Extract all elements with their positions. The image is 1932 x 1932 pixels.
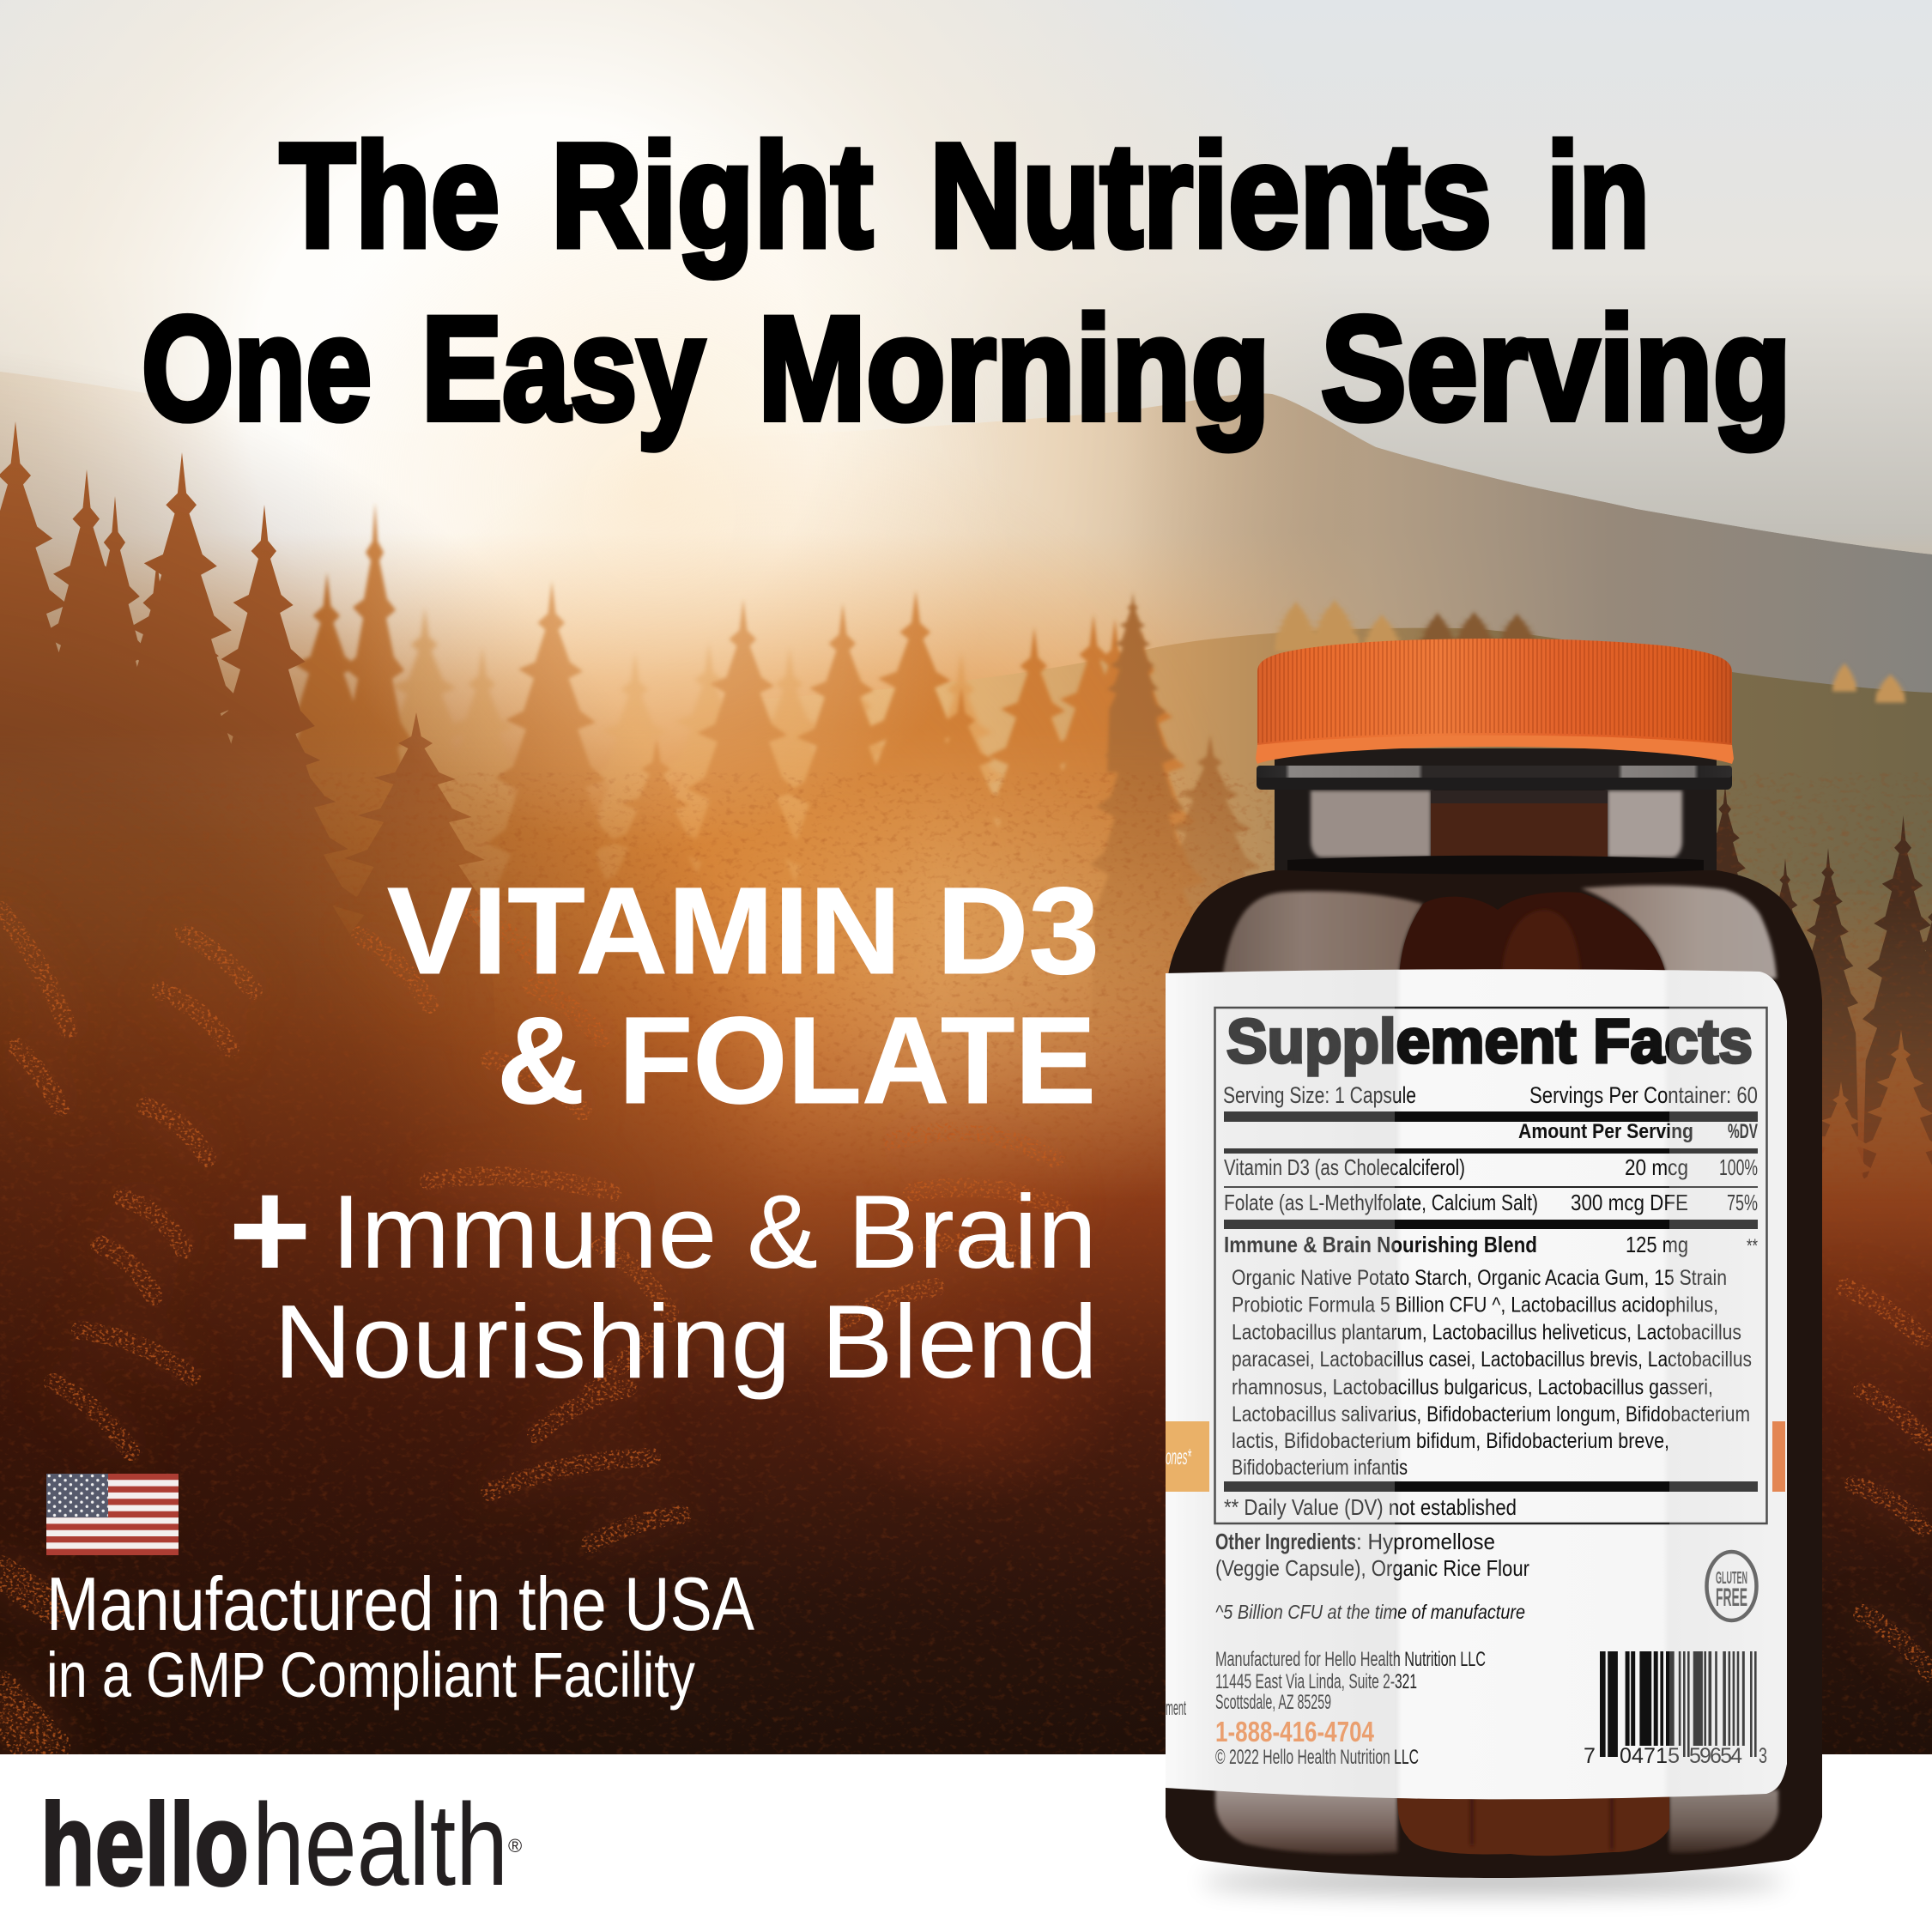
heading: Vitamin D3 and Folate: & FOLATE — [497, 991, 1096, 1130]
label side band: left orange: ones* — [1166, 1444, 1191, 1469]
blend ingredients list: paracasei, Lactobacillus casei, Lactobacillus brevis, Lactobacillus — [1232, 1348, 1752, 1372]
serving information: Servings Per Container: 60 — [1529, 1082, 1758, 1108]
phone number: 1-888-416-4704 — [1215, 1716, 1375, 1747]
bottle flange — [1257, 766, 1732, 790]
barcode — [1584, 1651, 1767, 1768]
row: Vitamin D3: 20 mcg — [1625, 1154, 1688, 1180]
other ingredients: Other Ingredients — [1215, 1529, 1356, 1554]
manufacturer address: Manufactured for Hello Health Nutrition LLC — [1215, 1648, 1486, 1671]
amount header: Amount Per Serving — [1518, 1120, 1693, 1143]
bottle neck — [1275, 748, 1717, 874]
title heading: Nutrients — [930, 113, 1492, 278]
title heading: The — [280, 113, 500, 278]
barcode: 04715 — [1620, 1744, 1680, 1768]
serving information — [1223, 1082, 1758, 1108]
title heading: Morning — [758, 287, 1270, 451]
serving information: Serving Size: 1 Capsule — [1223, 1082, 1416, 1108]
row: Folate: Folate (as L-Methylfolate, Calcium Salt) — [1224, 1190, 1538, 1215]
row: Immune and Brain blend: 125 mg — [1626, 1232, 1688, 1257]
blend ingredients list: rhamnosus, Lactobacillus bulgaricus, Lactobacillus gasseri, — [1232, 1375, 1713, 1399]
text block: Immune and Brain Nourishing Blend: Immune & Brain — [331, 1173, 1097, 1290]
row: Vitamin D3: Vitamin D3 (as Cholecalciferol) — [1224, 1154, 1465, 1180]
logo: hellohealth: health — [252, 1779, 508, 1910]
blend ingredients list — [1232, 1266, 1752, 1480]
title heading: Right — [551, 113, 873, 278]
capsules through lower glass — [1397, 1794, 1669, 1856]
icon: gluten free badge — [1706, 1552, 1756, 1620]
lower glass left — [1215, 1785, 1397, 1854]
text block: Immune and Brain Nourishing Blend — [228, 1151, 1098, 1400]
shoulder reflection left — [1222, 891, 1423, 978]
title heading — [142, 113, 1791, 451]
icon: gluten free badge: GLUTEN — [1716, 1569, 1747, 1588]
supplement facts heading: Supplement Facts — [1226, 1008, 1753, 1076]
manufacturer address: 11445 East Via Linda, Suite 2-321 — [1215, 1670, 1417, 1693]
blend ingredients list: Bifidobacterium infantis — [1232, 1456, 1408, 1480]
label reflection overlays — [1166, 970, 1787, 1798]
supplement facts panel — [1215, 1008, 1766, 1523]
icon: gluten free badge: FREE — [1716, 1584, 1747, 1612]
capsules through shoulder — [1399, 892, 1667, 978]
shoulder reflection right — [1581, 885, 1777, 978]
text block: Immune and Brain Nourishing Blend: Nourishing Blend — [274, 1283, 1098, 1400]
icon: American flag — [46, 1474, 179, 1555]
heading: Vitamin D3 and Folate: VITAMIN D3 — [387, 862, 1099, 1000]
row: Immune and Brain blend: ** — [1747, 1235, 1758, 1257]
blend ingredients list: Lactobacillus salivarius, Bifidobacterium longum, Bifidobacterium — [1232, 1402, 1750, 1426]
barcode: 59654 — [1689, 1744, 1742, 1768]
title heading: Serving — [1321, 287, 1791, 451]
row: Vitamin D3: 100% — [1719, 1154, 1758, 1180]
title heading: Easy — [421, 287, 705, 451]
text block: manufactured in the USA: in a GMP Compliant Facility — [46, 1639, 695, 1711]
row: Immune and Brain blend: Immune & Brain Nourishing Blend — [1224, 1232, 1537, 1257]
label side band: right orange — [1772, 1421, 1785, 1492]
text block: manufactured in the USA — [46, 1561, 754, 1711]
row: Immune and Brain blend — [1224, 1232, 1758, 1257]
product label: ment — [1166, 1697, 1186, 1720]
other ingredients: : Hypromellose — [1356, 1529, 1495, 1554]
bottle body glass — [1166, 870, 1822, 1878]
copyright: © 2022 Hello Health Nutrition LLC — [1215, 1746, 1419, 1769]
CFU footnote: ^5 Billion CFU at the time of manufacture — [1215, 1601, 1525, 1623]
product bottle — [1166, 639, 1822, 1893]
title heading: in — [1547, 113, 1650, 278]
lower glass right — [1669, 1790, 1778, 1853]
product label — [1166, 969, 1787, 1799]
manufacturer address: Scottsdale, AZ 85259 — [1215, 1691, 1331, 1714]
blend ingredients list: Probiotic Formula 5 Billion CFU ^, Lactobacillus acidophilus, — [1232, 1293, 1718, 1317]
logo: hellohealth: hello — [40, 1779, 249, 1910]
heading: Vitamin D3 and Folate — [387, 862, 1099, 1130]
row: Folate: 300 mcg DFE — [1571, 1190, 1688, 1215]
logo: hellohealth: ® — [508, 1835, 522, 1856]
text block: manufactured in the USA: Manufactured in the USA — [46, 1561, 754, 1646]
blend ingredients list: Lactobacillus plantarum, Lactobacillus heliveticus, Lactobacillus — [1232, 1320, 1741, 1344]
manufacturer address — [1215, 1648, 1486, 1714]
barcode: 7 — [1584, 1744, 1596, 1768]
title heading: One — [142, 287, 372, 451]
daily value note: ** Daily Value (DV) not established — [1224, 1494, 1517, 1520]
bottle shadow — [1202, 1869, 1785, 1893]
footer white band — [0, 1754, 1932, 1932]
logo: hellohealth — [40, 1779, 522, 1910]
text block: Immune and Brain Nourishing Blend: + — [228, 1151, 312, 1310]
row: Folate: 75% — [1727, 1190, 1758, 1215]
row: Vitamin D3 — [1224, 1154, 1758, 1180]
barcode: 3 — [1759, 1744, 1767, 1768]
label side band: left orange — [1166, 1421, 1209, 1492]
other ingredients: (Veggie Capsule), Organic Rice Flour — [1215, 1555, 1529, 1581]
blend ingredients list: Organic Native Potato Starch, Organic Acacia Gum, 15 Strain — [1232, 1266, 1727, 1290]
orange ribbed cap — [1256, 639, 1734, 764]
amount header: %DV — [1728, 1120, 1758, 1143]
blend ingredients list: lactis, Bifidobacterium bifidum, Bifidobacterium breve, — [1232, 1429, 1669, 1453]
other ingredients — [1215, 1529, 1529, 1581]
